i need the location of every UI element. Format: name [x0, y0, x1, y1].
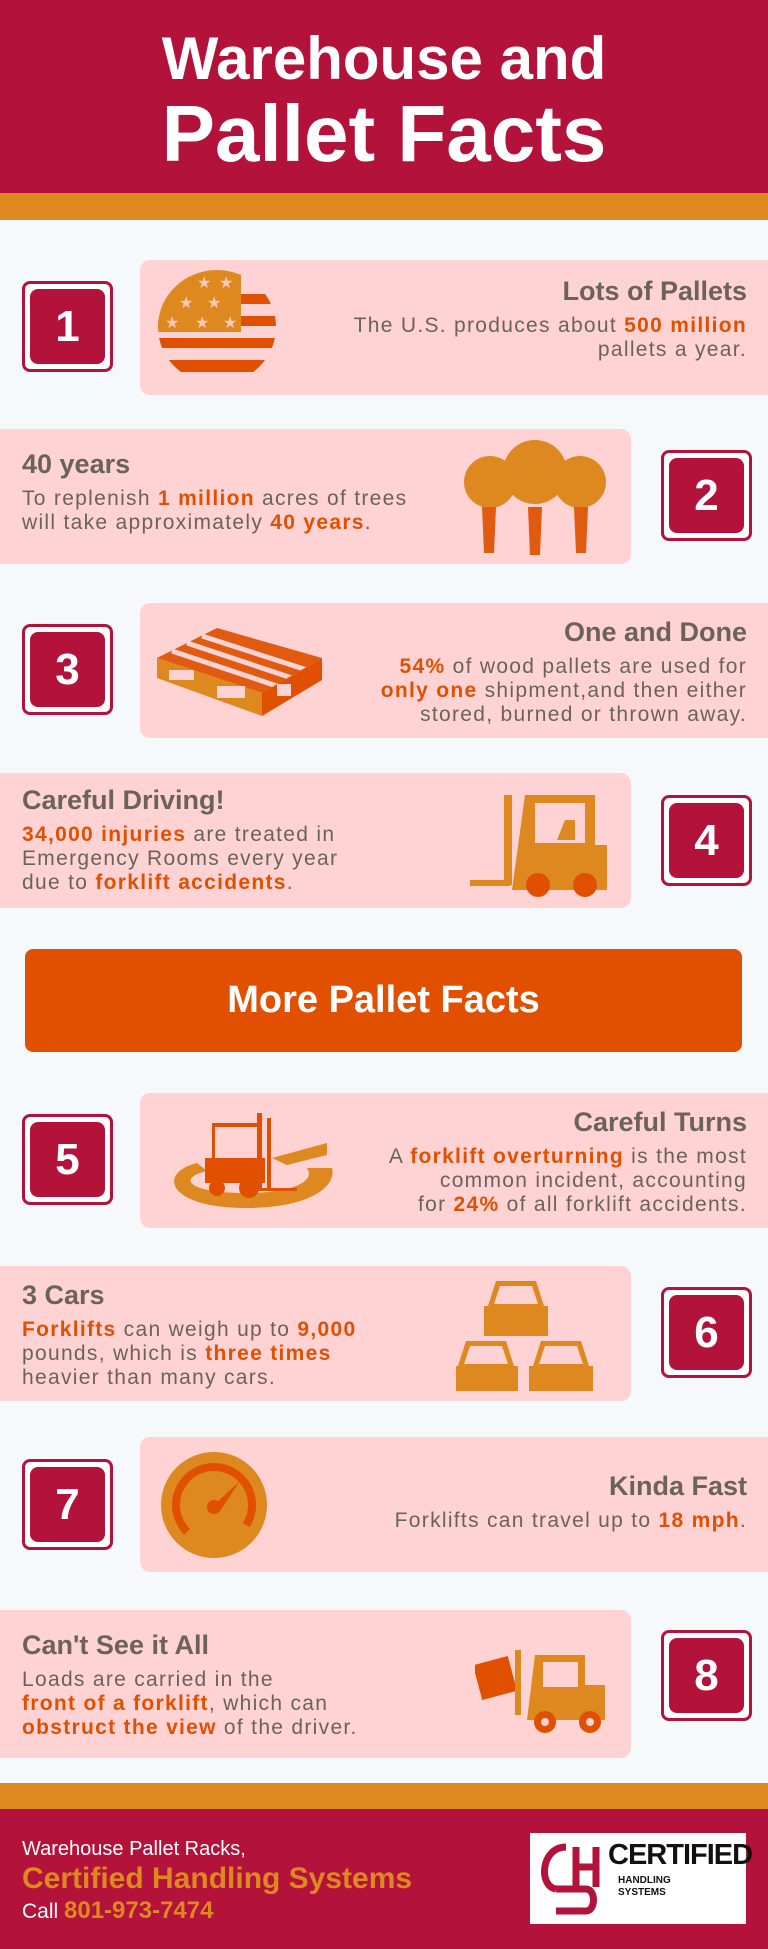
icon: flag globe: ★	[165, 315, 179, 332]
text: careful turns: for 24% of all forklift accidents.	[418, 1193, 747, 1216]
number 1	[22, 281, 113, 372]
banner: more pallet facts	[25, 949, 742, 1052]
number 6	[661, 1287, 752, 1378]
text: lots of pallets: pallets a year.	[598, 338, 747, 361]
footer text: Certified Handling Systems	[22, 1862, 412, 1895]
number 3: 3	[55, 644, 80, 694]
panel 2	[0, 429, 631, 564]
text: 3 cars: heavier than many cars.	[22, 1366, 276, 1389]
icon: flag globe: ★	[197, 275, 211, 292]
text: careful driving: Emergency Rooms every year	[22, 847, 338, 870]
icon: flag globe: ★	[223, 315, 237, 332]
number 5	[22, 1114, 113, 1205]
icon: flag globe: ★	[219, 275, 233, 292]
text: kinda fast: Kinda Fast	[609, 1471, 747, 1501]
text: 40 years: To replenish 1 million acres of trees	[22, 487, 407, 510]
text: careful driving	[22, 785, 338, 894]
icon: cars	[456, 1281, 593, 1391]
text: careful turns	[389, 1107, 747, 1216]
text: one and done: stored, burned or thrown away.	[420, 703, 747, 726]
number 7	[22, 1459, 113, 1550]
number 2: 2	[694, 470, 719, 520]
text: 3 cars: pounds, which is three times	[22, 1342, 332, 1365]
text: lots of pallets	[354, 276, 747, 361]
panel 8	[0, 1610, 631, 1758]
icon: flag globe	[158, 270, 276, 372]
logo: HANDLING	[618, 1875, 671, 1886]
text: 40 years	[22, 449, 407, 534]
text: 3 cars: Forklifts can weigh up to 9,000	[22, 1318, 356, 1341]
text: can't see it all: Can't See it All	[22, 1630, 209, 1660]
footer text	[22, 1838, 412, 1924]
text: 40 years: will take approximately 40 years.	[22, 511, 372, 534]
text: 3 cars: 3 Cars	[22, 1280, 105, 1310]
text: can't see it all: front of a forklift, which can	[22, 1692, 328, 1715]
text: one and done	[381, 617, 747, 726]
number 3	[22, 624, 113, 715]
text: careful driving: 34,000 injuries are treated in	[22, 823, 335, 846]
panel 7	[140, 1437, 768, 1572]
number 8: 8	[694, 1650, 719, 1700]
icon: forklift	[470, 795, 607, 897]
header	[0, 0, 768, 193]
text: lots of pallets: The U.S. produces about 500 million	[354, 314, 747, 337]
panel 5	[140, 1093, 768, 1228]
text: careful driving: Careful Driving!	[22, 785, 225, 815]
text: can't see it all	[22, 1630, 358, 1739]
number 6: 6	[694, 1308, 719, 1356]
number 1: 1	[55, 302, 80, 350]
logo: CERTIFIED	[608, 1839, 752, 1871]
icon: forklift turning	[174, 1113, 333, 1208]
number 7: 7	[55, 1480, 80, 1528]
number 8	[661, 1630, 752, 1721]
icon: trees	[464, 440, 606, 555]
icon: flag globe: ★	[195, 315, 209, 332]
logo	[530, 1833, 746, 1924]
text: careful turns: Careful Turns	[573, 1107, 747, 1137]
banner: more pallet facts: More Pallet Facts	[227, 979, 540, 1021]
panel 1	[140, 260, 768, 395]
panel 3	[140, 603, 768, 738]
text: careful turns: A forklift overturning is the most	[389, 1145, 747, 1168]
icon: flag globe: ★	[179, 295, 193, 312]
text: one and done: 54% of wood pallets are used for	[400, 655, 747, 678]
icon: forklift with load	[475, 1650, 605, 1733]
title: Warehouse and	[162, 25, 606, 92]
icon: flag globe: ★	[207, 295, 221, 312]
icon: pallet	[157, 628, 322, 716]
text: one and done: only one shipment,and then either	[381, 679, 747, 702]
text: 3 cars	[22, 1280, 356, 1389]
text: 40 years: 40 years	[22, 449, 130, 479]
title	[162, 25, 606, 178]
number 4: 4	[694, 816, 719, 864]
text: lots of pallets: Lots of Pallets	[562, 276, 747, 306]
number 4	[661, 795, 752, 886]
number 2	[661, 450, 752, 541]
footer text: Call 801-973-7474	[22, 1897, 213, 1924]
text: can't see it all: Loads are carried in the	[22, 1668, 274, 1691]
text: careful turns: common incident, accounting	[440, 1169, 747, 1192]
number 5: 5	[55, 1134, 80, 1184]
text: kinda fast: Forklifts can travel up to 18 mph.	[395, 1509, 747, 1532]
text: kinda fast	[395, 1471, 747, 1532]
text: careful driving: due to forklift accidents.	[22, 871, 294, 894]
icon: speedometer	[161, 1452, 267, 1558]
logo: SYSTEMS	[618, 1887, 666, 1898]
panel 6	[0, 1266, 631, 1401]
panel 4	[0, 773, 631, 908]
text: one and done: One and Done	[564, 617, 747, 647]
footer	[0, 1809, 768, 1949]
text: can't see it all: obstruct the view of the driver.	[22, 1716, 358, 1739]
footer text: Warehouse Pallet Racks,	[22, 1838, 246, 1860]
title: Pallet Facts	[162, 89, 606, 178]
